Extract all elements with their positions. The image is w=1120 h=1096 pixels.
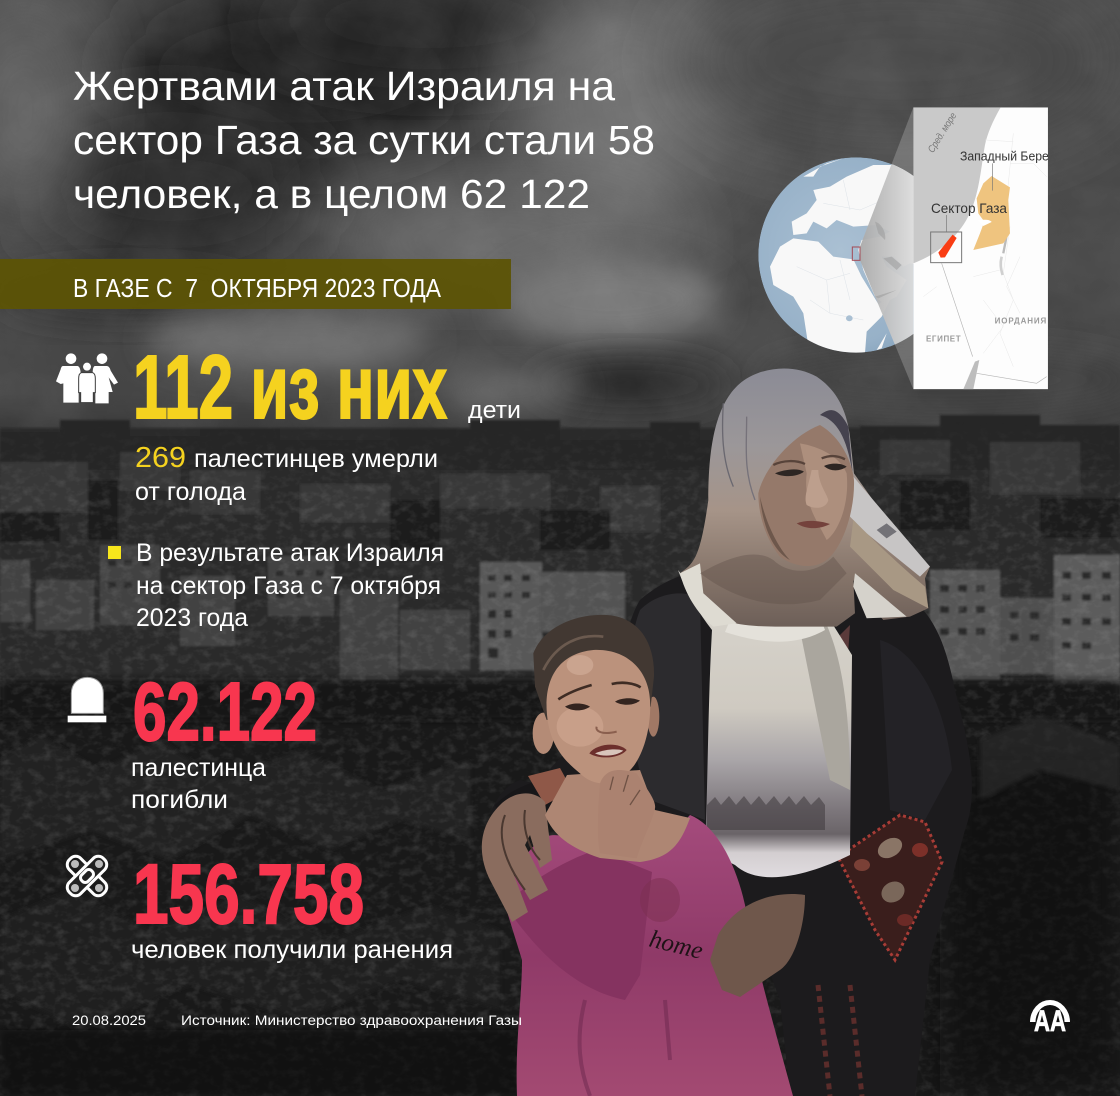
girl head [533,615,659,858]
note with bullet [108,539,444,632]
statistic: 112 children: дети [468,397,521,424]
woman face [758,425,854,566]
woman body [490,566,972,1096]
logo: Anadolu Agency: AA [1034,1005,1066,1038]
icon: bandage [64,853,110,899]
Gaza frame [931,232,962,263]
title: Жертвами атак Израиля на [73,63,615,109]
inset map [913,107,1054,389]
West Bank [973,176,1010,250]
embroidered cuff [838,815,942,960]
statistic: 112 children: 112 из них [133,338,447,438]
borders [942,263,1047,383]
embroidered collar [832,625,850,720]
statistic: starvation deaths: от голода [135,478,246,506]
woman arm and hand on sweater [495,775,570,820]
headscarf [680,368,930,627]
globe [758,158,914,353]
title: сектор Газа за сутки стали 58 [73,117,655,163]
sea [913,107,1001,263]
footer: date and source: 20.08.2025 [72,1013,146,1028]
rubble and tents [0,700,1120,1096]
terrain [923,133,1047,367]
statistic: killed: погибли [131,786,228,814]
sweater lettering: home [647,926,706,965]
statistic: killed: 62.122 [133,665,317,758]
photo: woman and girl [482,368,972,1096]
footer: date and source [72,1013,522,1028]
windows [108,560,1111,658]
white scarf [678,570,852,877]
icon: family [56,353,118,403]
note with bullet: В результате атак Израиля [136,539,444,567]
icon: gravestone [68,677,106,722]
girl fist [598,770,655,858]
inset map: ИОРДАНИЯ [995,317,1047,326]
smoke clouds [0,0,1120,412]
statistic: starvation deaths: 269 [135,442,186,474]
statistic: killed [131,665,317,814]
inset map: ЕГИПЕТ [926,334,961,343]
note with bullet: 2023 года [136,604,248,632]
statistic: starvation deaths: палестинцев умерли [194,445,438,473]
girl face [547,650,650,783]
land masses [770,158,914,353]
footer: date and source: Источник: Министерство здравоохранения Газы [181,1013,522,1028]
note with bullet: на сектор Газа с 7 октября [136,572,441,600]
location marker [852,247,860,260]
city skyline [0,415,1120,750]
title [73,63,655,217]
statistic: killed: палестинца [131,754,266,782]
date banner [0,259,511,309]
girl sweater [505,815,793,1096]
date banner: В ГАЗЕ С 7 ОКТЯБРЯ 2023 ГОДА [73,273,442,303]
statistic: starvation deaths [135,442,438,506]
woman hand on shoulder [482,793,552,922]
woman hand on arm [710,894,805,997]
panel: location map [758,107,1054,389]
logo: Anadolu Agency [1030,1000,1070,1038]
zoom wedge [860,107,913,389]
inset map: Западный Берег [960,148,1054,163]
statistic: wounded: 156.758 [133,847,364,941]
labels: Сред. море [926,111,960,155]
panel: location map: Сектор Газа [931,201,1007,216]
statistic: wounded: человек получили ранения [131,936,453,964]
girl neck [545,770,690,862]
title: человек, а в целом 62 122 [73,171,590,217]
Gaza strip [938,235,957,258]
